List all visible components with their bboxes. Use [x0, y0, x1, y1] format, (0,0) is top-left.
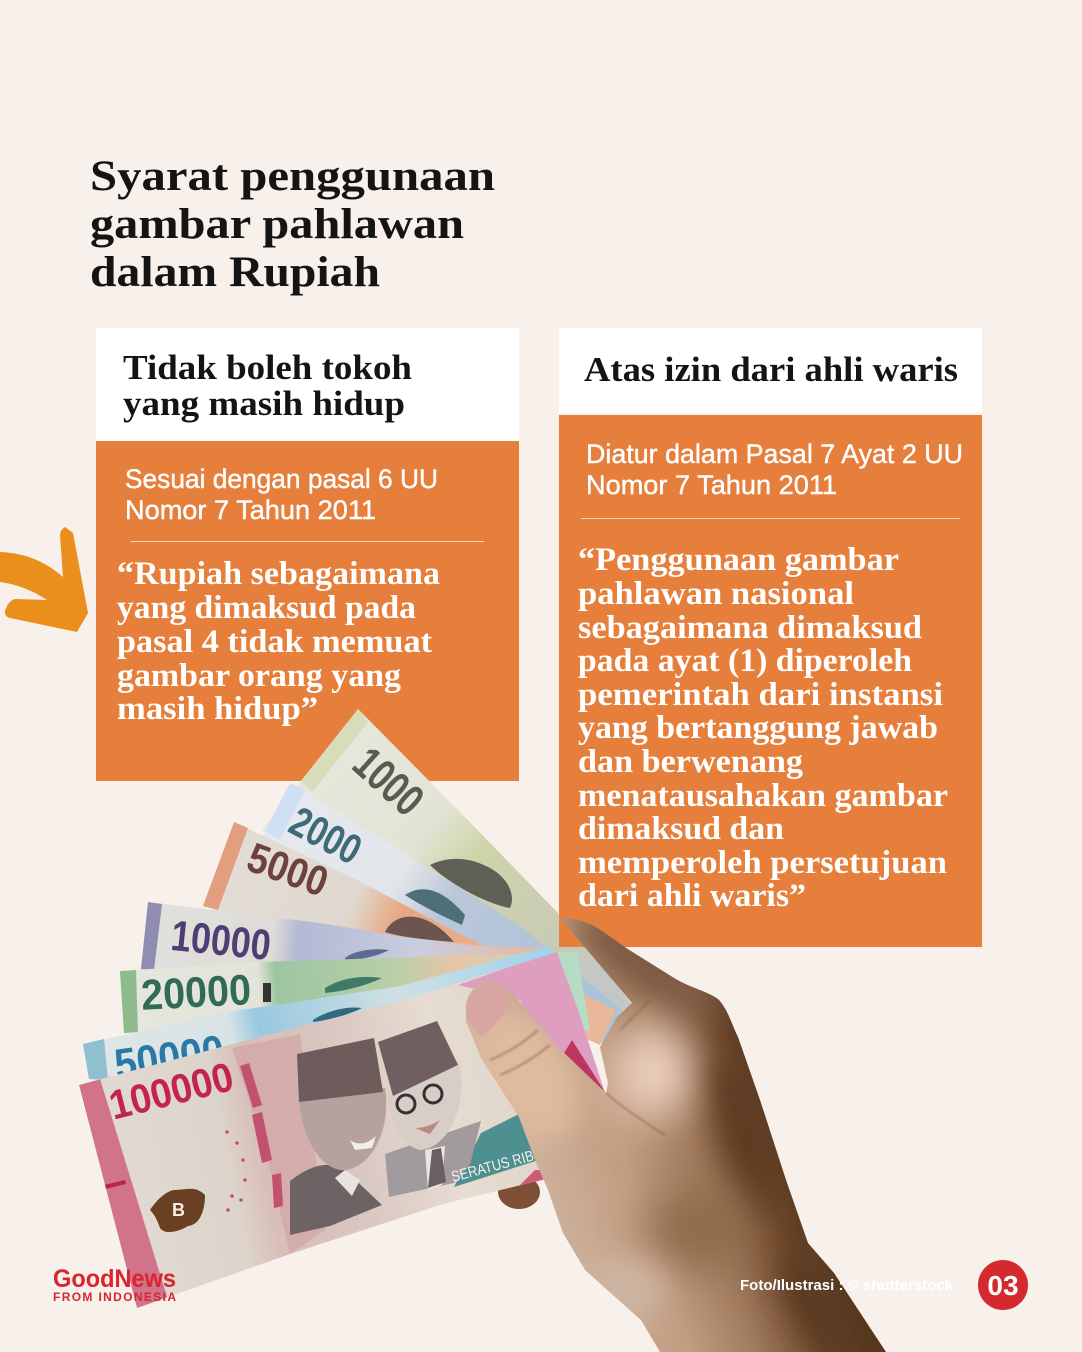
logo: GoodNews from Indonesia: FROM INDONESIA	[53, 1290, 176, 1304]
panel heading box	[559, 328, 982, 413]
quote text: “Penggunaan gambar	[578, 542, 899, 578]
banknotes fan	[79, 709, 632, 1308]
legal basis text: Sesuai dengan pasal 6 UU	[125, 464, 438, 494]
banknote 2000	[236, 783, 622, 1045]
banknote 100000 with portraits	[79, 950, 610, 1308]
banknote 5000	[203, 822, 616, 1045]
portrait: right figure	[378, 1021, 481, 1197]
title	[90, 153, 495, 296]
hand holding the banknotes	[448, 896, 886, 1352]
quote text: pemerintah dari instansi	[578, 677, 943, 713]
banknote 2000: 2000	[282, 797, 369, 874]
panel heading text	[123, 348, 412, 423]
quote text: dari ahli waris”	[578, 878, 806, 914]
legal basis text: Nomor 7 Tahun 2011	[125, 495, 376, 525]
icon: orange arrow	[0, 527, 88, 632]
banknote denomination: 100000	[105, 1053, 238, 1129]
panel body box	[559, 415, 982, 947]
panel: atas izin dari ahli waris	[559, 328, 982, 947]
banknote 5000: 5000	[241, 833, 334, 906]
title: dalam Rupiah	[90, 249, 380, 296]
panel: tidak boleh tokoh	[96, 328, 519, 781]
title: Syarat penggunaan	[90, 153, 495, 200]
quote text: pada ayat (1) diperoleh	[578, 643, 912, 679]
quote text: sebagaimana dimaksud	[578, 610, 922, 646]
photo credit: Foto/Ilustrasi : © shutterstock	[740, 1277, 954, 1294]
panel heading text: Atas izin dari ahli waris	[584, 350, 958, 389]
quote text: gambar orang yang	[117, 658, 402, 694]
legal basis text	[586, 439, 963, 500]
icon: orchid logo	[150, 1189, 205, 1232]
title: gambar pahlawan	[90, 201, 464, 248]
banknote 10000	[141, 902, 590, 1060]
banknote 20000	[120, 952, 590, 1060]
skin creases	[490, 1000, 665, 1135]
portrait: left figure	[290, 1038, 386, 1235]
banknote 10000: 10000	[169, 912, 273, 970]
quote text: dan berwenang	[578, 744, 804, 780]
banknote 50000	[83, 946, 580, 1100]
quote text: yang dimaksud pada	[117, 590, 416, 626]
quote text: dimaksud dan	[578, 811, 784, 847]
thumbnail	[466, 984, 510, 1037]
quote text	[117, 556, 440, 727]
quote text: masih hidup”	[117, 691, 318, 727]
page number	[978, 1260, 1028, 1310]
quote text: yang bertanggung jawab	[578, 710, 938, 746]
panel body box	[96, 441, 519, 781]
quote text	[578, 542, 948, 914]
page number: 03	[987, 1270, 1019, 1301]
quote text: pahlawan nasional	[578, 576, 854, 612]
panel heading text: Tidak boleh tokoh	[123, 348, 412, 387]
quote text: menatausahakan gambar	[578, 778, 948, 814]
banknote 50000: 50000	[112, 1027, 227, 1089]
panel heading box	[96, 328, 519, 441]
banknote 1000	[262, 709, 632, 1045]
legal basis text: Nomor 7 Tahun 2011	[586, 470, 837, 500]
legal basis text	[125, 464, 438, 525]
panel heading text: yang masih hidup	[123, 384, 405, 423]
banknote 20000: 20000	[140, 966, 252, 1020]
quote text: “Rupiah sebagaimana	[117, 556, 440, 592]
banknote 1000: 1000	[343, 737, 434, 826]
quote text: pasal 4 tidak memuat	[117, 624, 432, 660]
banknote 100000 with portraits: B	[172, 1200, 185, 1220]
legal basis text: Diatur dalam Pasal 7 Ayat 2 UU	[586, 439, 963, 469]
logo: GoodNews from Indonesia: GoodNews	[53, 1265, 176, 1293]
quote text: memperoleh persetujuan	[578, 845, 947, 881]
banknote caption: SERATUS RIBU	[450, 1145, 545, 1186]
fingertip behind banknotes	[498, 1175, 540, 1209]
logo: GoodNews from Indonesia	[53, 1265, 176, 1304]
